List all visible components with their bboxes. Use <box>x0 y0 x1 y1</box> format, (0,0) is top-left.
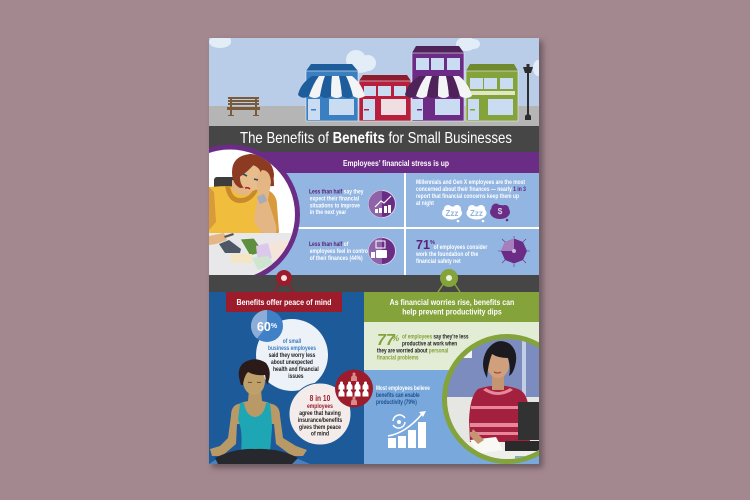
bench <box>227 97 260 116</box>
awning: purple <box>405 76 472 98</box>
stat: 77%: % <box>392 334 399 343</box>
icons: sleep thought clouds <box>442 204 510 222</box>
infographic page <box>209 38 539 464</box>
heading <box>226 292 342 312</box>
callout: 60 percent: said they worry less <box>269 353 315 359</box>
text: most employees believe: productivity (79%) <box>376 399 417 406</box>
text: millennials: at night <box>416 201 434 207</box>
stat: 71%: % <box>430 240 435 246</box>
stat: 77%: say they’re less <box>432 334 468 341</box>
text: millennials: concerned about their finances — nearly 1 in 3 <box>416 187 526 193</box>
callout: 8 in 10: gives them peace <box>299 425 341 431</box>
title: The Benefits of Benefits for Small Businesses <box>240 130 512 147</box>
panel: peace of mind <box>209 270 364 464</box>
illustration: stressed woman <box>209 144 300 275</box>
icons: sleep thought clouds: $ <box>498 206 503 216</box>
panel: productivity <box>364 269 539 464</box>
text: less than half improve: in the next year <box>310 210 347 216</box>
callout: 60 percent: of small <box>283 339 302 345</box>
heading: Benefits offer peace of mind <box>236 297 332 307</box>
text: most employees believe: benefits can enable <box>376 392 420 399</box>
callout: 8 in 10 <box>289 383 351 445</box>
icon: productivity growth chart <box>388 411 426 448</box>
stat: 71%: financial safety net <box>416 259 461 265</box>
text: millennials: report that financial concerns keep them up <box>416 194 519 200</box>
text: less than half in control: Less than half <box>309 242 342 248</box>
text: less than half improve: say they <box>342 189 364 196</box>
stat: 71%: 71 <box>416 238 430 252</box>
clouds <box>209 36 543 76</box>
street lamp <box>523 64 533 120</box>
stat: 77% <box>377 332 468 362</box>
store: blue <box>306 64 358 121</box>
icon: rising chart <box>368 190 396 218</box>
icons: sleep thought clouds: Zzz <box>446 209 458 218</box>
text: millennials: Millennials and Gen X employees are the most <box>416 180 525 186</box>
panel heading <box>262 152 539 173</box>
callout: 8 in 10: employees <box>307 404 333 410</box>
text: most employees believe: Most employees believe <box>376 385 430 392</box>
icon: money in hand <box>368 238 396 264</box>
green pin <box>438 269 460 292</box>
text: less than half improve: expect their financial <box>310 196 359 203</box>
stat: 77%: financial problems <box>377 355 419 362</box>
store: red <box>359 75 411 121</box>
stat: 71%: work the foundation of the <box>415 252 478 258</box>
callout: 60 percent: about unexpected <box>271 360 313 366</box>
awning: blue <box>298 76 365 98</box>
text: less than half in control: of their finances (44%) <box>310 256 363 262</box>
chart: 60 percent pie <box>251 310 283 342</box>
title band <box>209 126 539 153</box>
red pin <box>274 270 294 292</box>
chart: 60 percent pie: 60 <box>257 320 271 334</box>
chart: 60 percent pie: % <box>271 323 278 330</box>
callout: 8 in 10: insurance/benefits <box>298 418 342 424</box>
stat: 77%: productive at work when <box>402 341 458 348</box>
icon: red people circle <box>335 370 373 408</box>
stat: 71% <box>416 240 488 264</box>
callout: 8 in 10: 8 in 10 <box>310 393 330 403</box>
text: less than half in control: employees feel in control <box>310 249 370 255</box>
store: green <box>466 64 518 121</box>
panel: financial stress <box>262 152 539 275</box>
header illustration: street scene <box>209 36 543 126</box>
heading: As financial worries rise, benefits can <box>390 297 515 307</box>
connector band <box>209 275 539 292</box>
callout: 60 percent: health and financial <box>273 367 319 373</box>
text: less than half in control: of <box>342 242 348 248</box>
panel heading: Employees’ financial stress is up <box>343 158 449 168</box>
illustration: woman at desk <box>442 334 539 464</box>
heading <box>364 292 539 322</box>
icon: safety net pie <box>498 236 530 267</box>
callout: 60 percent: business employees <box>268 346 316 352</box>
callout: 8 in 10: agree that having <box>299 411 341 417</box>
icons: sleep thought clouds: Zzz <box>470 209 483 218</box>
callout: 60 percent <box>251 310 328 391</box>
stat: 77%: of employees <box>402 334 432 341</box>
store: purple <box>412 46 464 121</box>
text: less than half improve: Less than half <box>309 189 342 196</box>
callout: 60 percent: issues <box>288 374 304 380</box>
heading: help prevent productivity dips <box>402 307 502 317</box>
stat: 77%: 77 <box>377 332 396 349</box>
callout: 8 in 10: of mind <box>311 431 330 438</box>
text: less than half improve: situations to improve <box>310 203 360 210</box>
stat: 77%: they are worried about personal <box>377 348 448 355</box>
illustration: meditating person <box>209 359 310 464</box>
stat: 71%: of employees consider <box>434 245 488 251</box>
